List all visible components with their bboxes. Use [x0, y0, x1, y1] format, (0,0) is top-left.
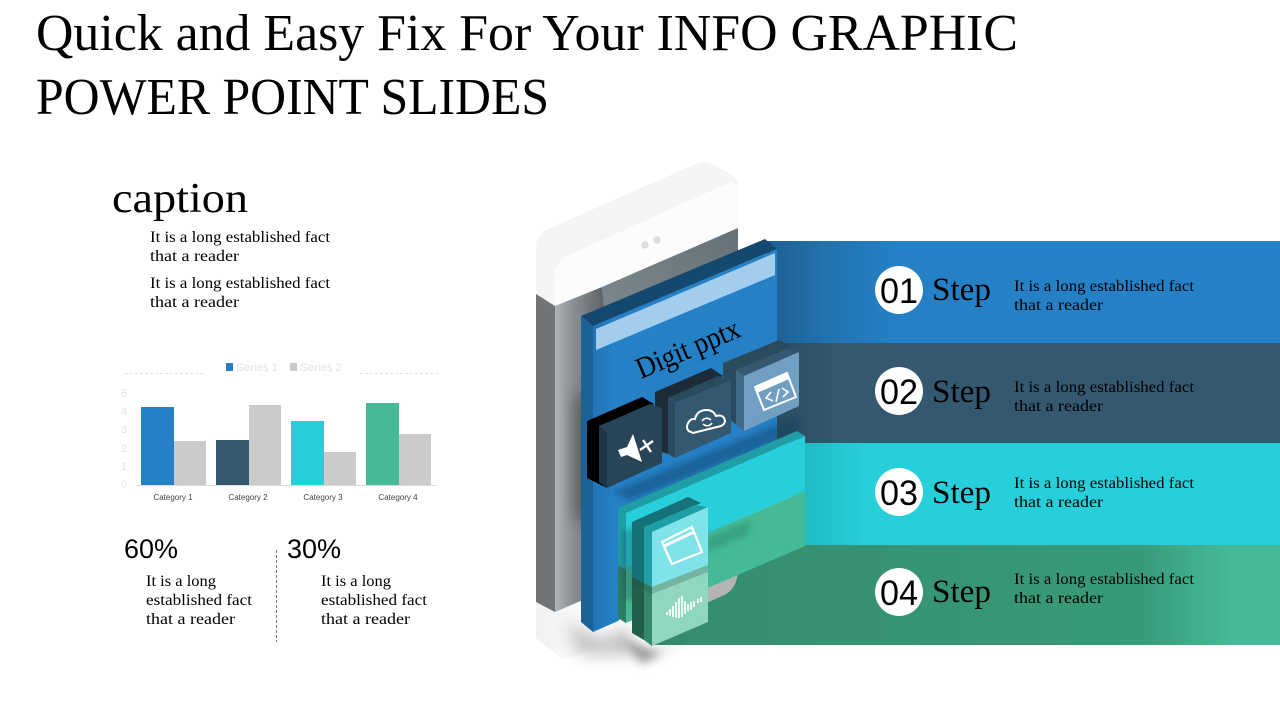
step 02: Step	[932, 374, 991, 410]
bar chart: 4	[121, 406, 127, 418]
step 01	[875, 266, 1195, 314]
icon tile: mute	[587, 397, 662, 488]
caption block	[112, 176, 331, 311]
cyan and green panel	[618, 431, 805, 623]
stat: 30%	[287, 534, 428, 628]
step 01: Step	[932, 272, 991, 308]
step 02: It is a long established fact	[1014, 379, 1195, 396]
smartphone	[536, 162, 738, 660]
stat: 60%	[124, 534, 253, 628]
caption block: caption	[112, 176, 248, 222]
bar chart: 5	[121, 388, 127, 400]
icon tile: window	[632, 497, 708, 587]
bar chart: Category 2	[228, 493, 268, 502]
stat: 30%: that a reader	[321, 611, 411, 628]
bar chart: 3	[121, 424, 127, 436]
title: Quick and Easy Fix For Your INFO GRAPHIC	[36, 5, 1018, 62]
step 01: that a reader	[1014, 297, 1104, 314]
step 04: 04	[880, 574, 918, 613]
panel shadows	[565, 395, 690, 664]
bar chart: Series 1	[236, 362, 278, 374]
caption block: that a reader	[150, 294, 240, 311]
step 02	[875, 367, 1195, 415]
bar chart: Category 4	[378, 493, 418, 502]
panel label: Digit pptx	[631, 312, 745, 385]
stat: 30%: 30%	[287, 534, 341, 564]
bar chart: 1	[121, 461, 127, 473]
bar chart: Category 3	[303, 493, 343, 502]
step 04: It is a long established fact	[1014, 571, 1195, 588]
caption block: that a reader	[150, 248, 240, 265]
stat: 60%: that a reader	[146, 611, 236, 628]
stat: 60%: established fact	[146, 592, 253, 609]
step 03	[875, 468, 1195, 516]
step 03: Step	[932, 475, 991, 511]
caption block: It is a long established fact	[150, 275, 331, 292]
stat: 30%: It is a long	[321, 573, 391, 590]
bar chart: Category 1	[153, 493, 193, 502]
bar chart	[121, 362, 439, 502]
step 04	[875, 568, 1195, 616]
step 04: that a reader	[1014, 590, 1104, 607]
step 01: It is a long established fact	[1014, 278, 1195, 295]
step 02: 02	[880, 373, 918, 412]
step 03: It is a long established fact	[1014, 475, 1195, 492]
step 01: 01	[880, 272, 918, 311]
icon tile: cloud	[655, 368, 731, 458]
step 03: 03	[880, 474, 918, 513]
step 04: Step	[932, 574, 991, 610]
bar chart: 2	[121, 443, 127, 455]
bar chart: Series 2	[300, 362, 342, 374]
tile shadows	[612, 415, 800, 500]
step bands	[655, 241, 1280, 645]
bar chart: 0	[121, 479, 127, 491]
caption block: It is a long established fact	[150, 229, 331, 246]
title	[36, 5, 1018, 126]
blue panel	[581, 239, 777, 632]
title: POWER POINT SLIDES	[36, 69, 549, 126]
stat: 30%: established fact	[321, 592, 428, 609]
icon tile: sound wave	[632, 565, 708, 646]
stat: 60%: 60%	[124, 534, 178, 564]
stat: 60%: It is a long	[146, 573, 216, 590]
step 02: that a reader	[1014, 398, 1104, 415]
step 03: that a reader	[1014, 494, 1104, 511]
icon tile: code	[723, 340, 799, 431]
